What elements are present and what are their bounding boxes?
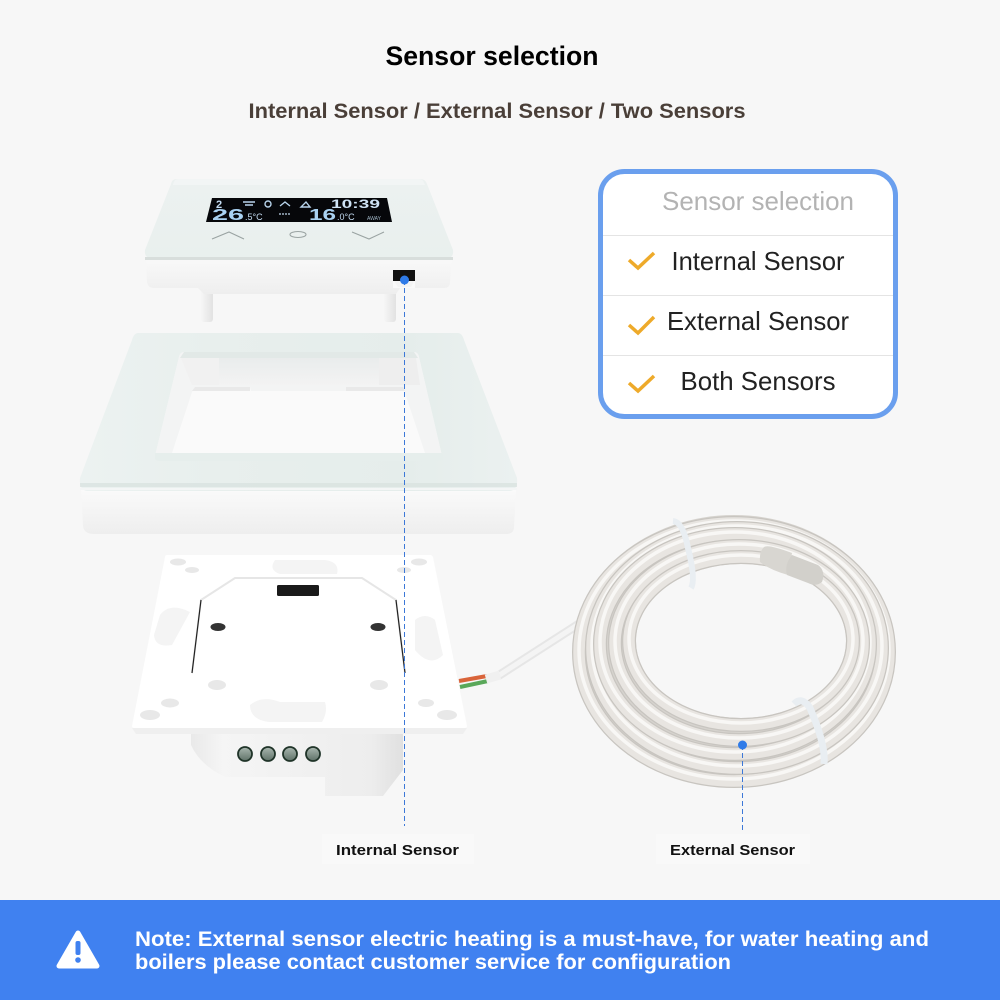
title: Sensor selection <box>386 41 598 71</box>
fourth strand <box>615 544 863 740</box>
option: internal sensor: Internal Sensor <box>672 246 845 276</box>
LCD screen: 16 <box>309 207 336 224</box>
icon: warning triangle <box>59 933 97 966</box>
sensor probe <box>760 546 823 585</box>
sensor wire and cable tail <box>459 622 582 687</box>
terminal screws <box>238 747 320 761</box>
wiring backplate <box>132 555 467 796</box>
note text: Note: External sensor electric heating is a must-have, for water heating and <box>135 928 929 951</box>
row dividers <box>603 236 893 356</box>
screw holes <box>140 558 457 720</box>
outer strand <box>579 521 889 781</box>
frame opening <box>172 387 425 453</box>
unit side <box>146 256 452 294</box>
panel box <box>600 172 896 416</box>
internal sensor leader line <box>400 276 409 826</box>
frame side <box>81 490 516 534</box>
coil shadow base <box>574 515 894 785</box>
plate inner outline <box>192 578 405 673</box>
LCD screen <box>206 197 392 224</box>
external sensor leader line <box>738 740 747 830</box>
label: external sensor <box>656 834 810 864</box>
subtitle: Internal Sensor / External Sensor / Two Sensors <box>248 100 746 123</box>
LCD screen: .5°C <box>245 212 263 222</box>
touch buttons <box>212 232 384 239</box>
sensor port <box>393 270 415 288</box>
LCD screen: AWAY <box>367 216 382 222</box>
LCD screen: 10:39 <box>331 197 381 211</box>
option: external sensor: External Sensor <box>667 306 849 336</box>
option: both sensors: Both Sensors <box>680 366 836 396</box>
bottom cable tie <box>794 701 824 764</box>
mounting slots <box>154 560 443 722</box>
frame inner well <box>155 352 442 461</box>
note banner <box>0 900 1000 1000</box>
label: external sensor: External Sensor <box>670 842 795 859</box>
LCD screen: 26 <box>212 207 244 224</box>
label: internal sensor: Internal Sensor <box>336 842 459 859</box>
label: internal sensor <box>322 834 474 864</box>
note text <box>135 928 929 974</box>
third strand <box>600 532 870 754</box>
connector slot <box>277 585 319 596</box>
LCD screen: 2 <box>216 199 222 211</box>
top cable tie <box>673 521 693 588</box>
external sensor cable coil <box>574 515 894 785</box>
glass frame <box>80 333 517 534</box>
second strand <box>592 526 882 768</box>
plate <box>132 555 467 728</box>
thermostat display unit <box>145 179 453 322</box>
frame glass face <box>80 333 517 491</box>
note text: boilers please contact customer service for configuration <box>135 951 731 974</box>
glass front face <box>145 179 453 258</box>
panel: sensor selection options <box>600 172 896 416</box>
LCD screen: .0°C <box>337 212 355 222</box>
panel heading: Sensor selection <box>662 186 854 216</box>
inner strand <box>629 555 853 725</box>
mounting pegs <box>201 288 396 322</box>
rear housing <box>191 733 403 796</box>
